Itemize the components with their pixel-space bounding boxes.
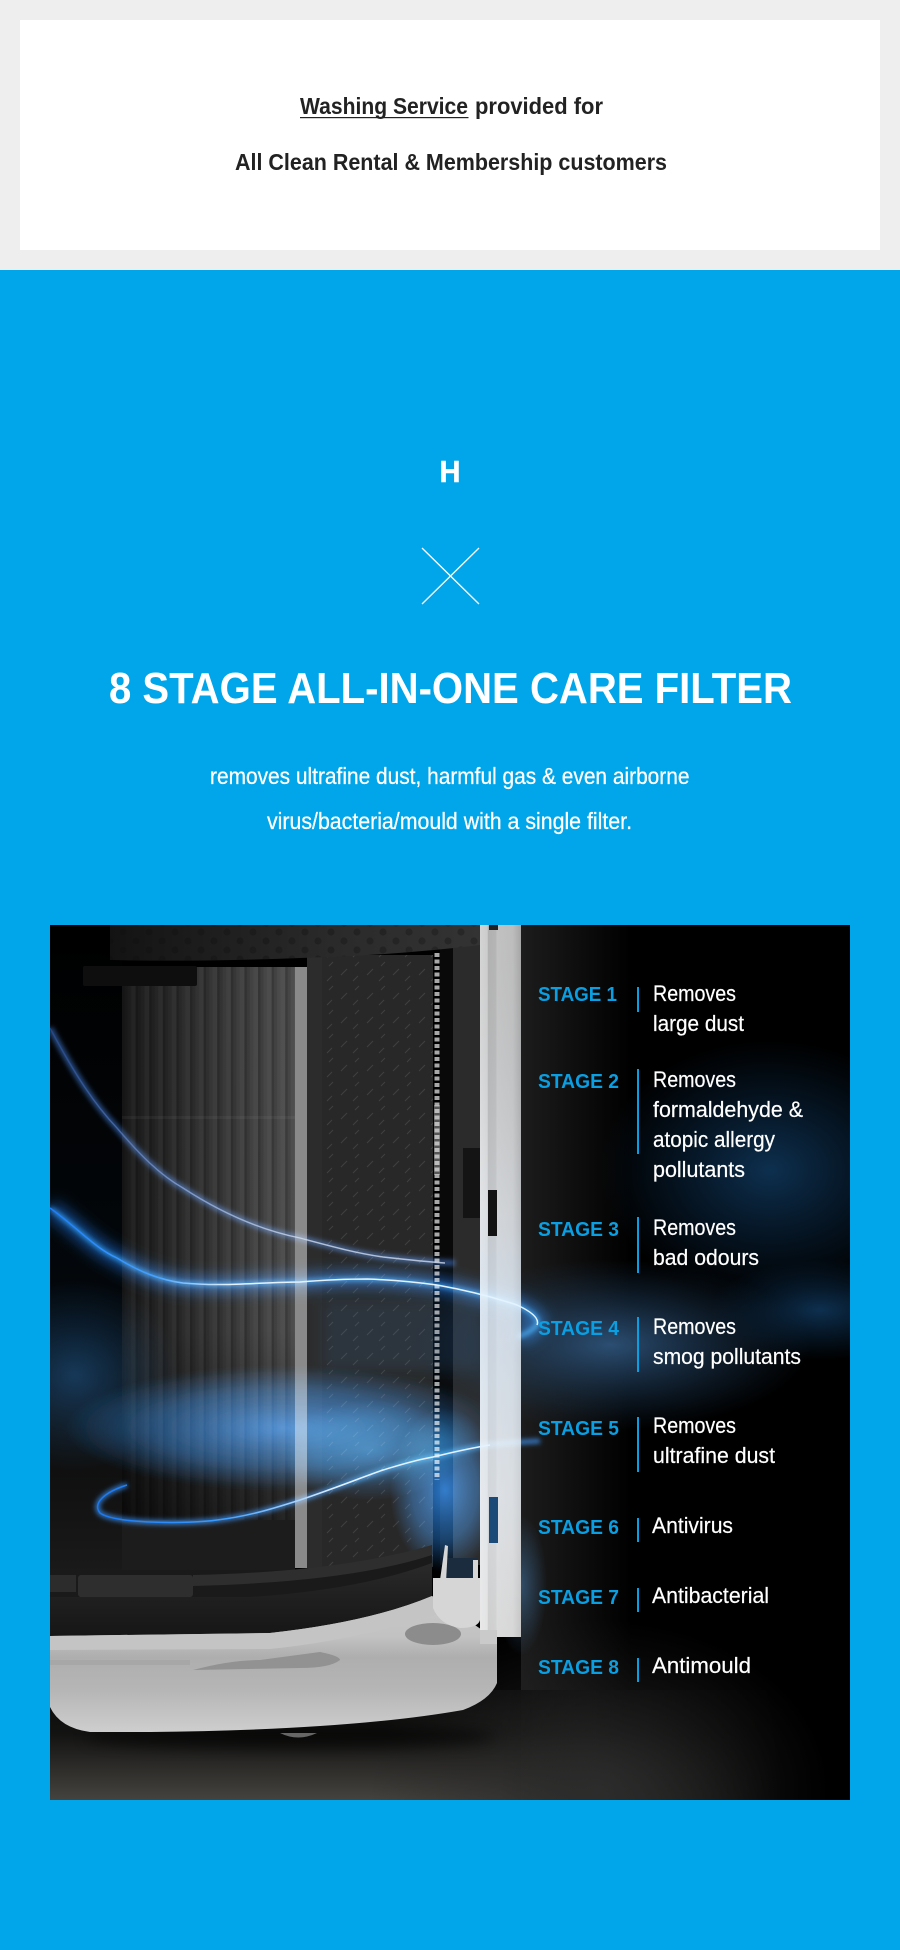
stage 4: smog pollutants	[653, 1344, 801, 1369]
text: customers line: All Clean Rental & Membership customers	[235, 149, 667, 175]
panel: washing service notice	[20, 20, 880, 250]
underline	[300, 117, 468, 118]
white column	[480, 925, 521, 1637]
stage 6	[538, 1513, 733, 1542]
slit and hole in base	[193, 1652, 340, 1670]
stage 3	[538, 1215, 759, 1273]
left dark area	[50, 1191, 122, 1570]
chain strip	[434, 953, 440, 1480]
air streak: lower loop	[98, 1441, 540, 1522]
heading letter H: H	[440, 454, 460, 489]
stage 3: STAGE 3	[538, 1218, 619, 1241]
photo illustration	[50, 925, 850, 1800]
blue glow band	[74, 1368, 480, 1488]
subtitle: virus/bacteria/mould with a single filter.	[267, 808, 632, 834]
stage 8: Antimould	[652, 1653, 751, 1678]
stage 3: bad odours	[653, 1245, 759, 1270]
stage 3: Removes	[653, 1215, 736, 1240]
stage 2: formaldehyde &	[653, 1097, 803, 1122]
stage 7: STAGE 7	[538, 1586, 619, 1609]
stage 8	[538, 1653, 751, 1682]
stage 6: Antivirus	[652, 1513, 733, 1538]
wheel	[280, 1733, 317, 1738]
stage 7	[538, 1583, 769, 1612]
stage 4: Removes	[653, 1314, 736, 1339]
stage 1: Removes	[653, 981, 736, 1006]
stage 2: Removes	[653, 1067, 736, 1092]
stage 1: STAGE 1	[538, 983, 617, 1006]
grey top background	[0, 0, 900, 270]
stage 1	[538, 981, 744, 1036]
dark rim band and tab	[50, 1555, 432, 1635]
mesh layer	[322, 955, 433, 1567]
text: washing service underlined: Washing Service	[300, 93, 468, 119]
dark ring	[328, 1563, 432, 1590]
floor	[50, 1690, 722, 1800]
icon: thin cross	[422, 548, 479, 604]
pleated filter	[122, 967, 295, 1573]
stage 5: ultrafine dust	[653, 1443, 775, 1468]
stage 4: STAGE 4	[538, 1317, 620, 1340]
column side glow	[508, 1522, 544, 1648]
stage 6: STAGE 6	[538, 1516, 619, 1539]
subtitle: removes ultrafine dust, harmful gas & even airborne	[210, 763, 690, 789]
panel: filter photo with stage list	[50, 925, 850, 1800]
stage 5: Removes	[653, 1413, 736, 1438]
stage list	[538, 981, 803, 1682]
title: 8 STAGE ALL-IN-ONE CARE FILTER	[109, 664, 792, 713]
stage 2	[538, 1067, 803, 1182]
stage 2: pollutants	[653, 1157, 745, 1182]
air streak: bright middle	[50, 1208, 538, 1337]
right text panel background	[521, 925, 850, 1800]
stage 2: atopic allergy	[653, 1127, 775, 1152]
white base	[50, 1596, 497, 1732]
inner column	[440, 945, 453, 1565]
top dotted dome	[110, 925, 480, 961]
stage 5: STAGE 5	[538, 1417, 619, 1440]
stage 4	[538, 1314, 801, 1372]
subtitle	[210, 763, 690, 834]
stage 1: large dust	[653, 1011, 744, 1036]
stage 2: STAGE 2	[538, 1070, 619, 1093]
filter strip	[295, 967, 307, 1568]
text: provided for: provided for	[475, 93, 603, 119]
bracket	[433, 1545, 480, 1628]
stage 8: STAGE 8	[538, 1656, 619, 1679]
floor shadow	[116, 1730, 477, 1750]
stage 5	[538, 1413, 775, 1472]
air streak: upper faint	[50, 1028, 455, 1263]
stage 7: Antibacterial	[652, 1583, 769, 1608]
dark slot behind bracket	[446, 1558, 478, 1578]
